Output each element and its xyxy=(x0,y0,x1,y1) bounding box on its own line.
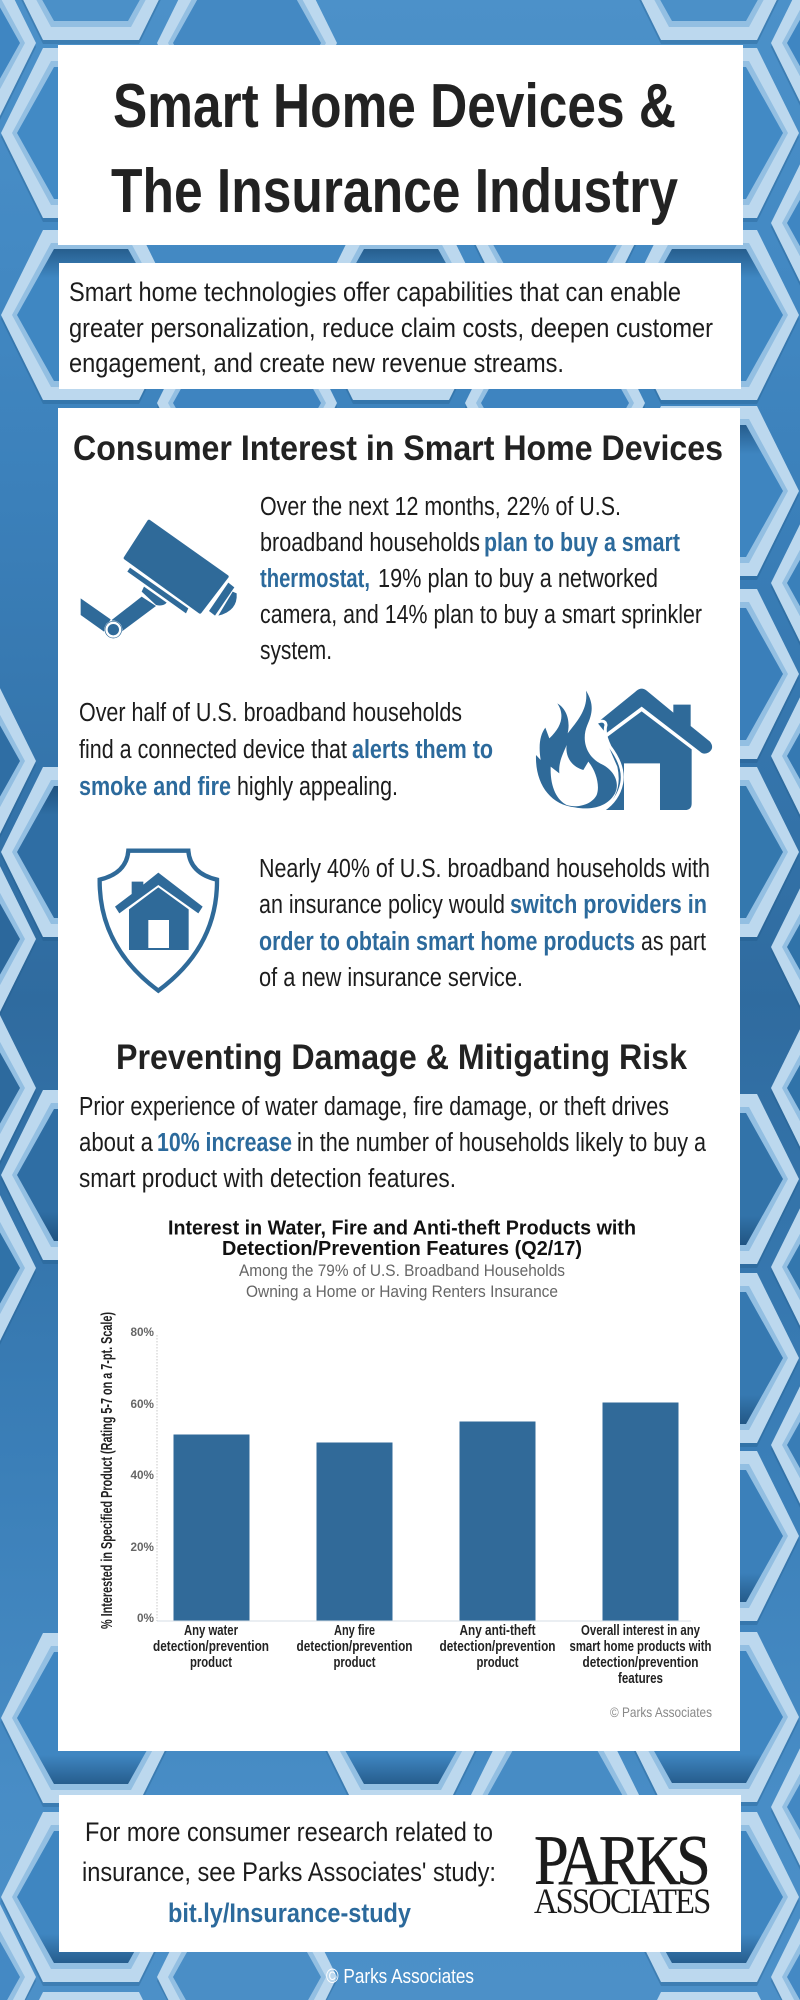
x axis labels: Overall interest in any xyxy=(581,1623,700,1639)
x axis labels: detection/prevention xyxy=(440,1639,556,1655)
bars xyxy=(174,1402,678,1620)
x axis labels: features xyxy=(618,1671,663,1687)
y axis labels: 0% xyxy=(137,1611,154,1625)
y axis labels: 40% xyxy=(130,1468,154,1482)
text: plan to buy: camera, and 14% plan to buy a smart sprinkler xyxy=(260,601,702,629)
icon: house on fire xyxy=(536,689,712,810)
text: plan to buy: system. xyxy=(260,637,332,665)
footer text: insurance, see Parks Associates' study: xyxy=(82,1857,496,1887)
x axis labels: product xyxy=(190,1655,232,1671)
intro text xyxy=(69,277,713,378)
panel: main content xyxy=(58,408,740,1751)
chart subtitle: Owning a Home or Having Renters Insurance xyxy=(246,1282,558,1301)
x axis labels: product xyxy=(334,1655,376,1671)
text: smoke and fire: smoke and fire xyxy=(79,773,231,801)
text: plan to buy xyxy=(260,493,702,665)
icon: security camera xyxy=(81,521,237,639)
chart subtitle xyxy=(239,1261,565,1301)
intro text: engagement, and create new revenue streams. xyxy=(69,348,564,378)
y axis labels: 60% xyxy=(130,1397,154,1411)
y axis labels: 80% xyxy=(130,1325,154,1339)
text: plan to buy: broadband households xyxy=(260,529,480,557)
text: plan to buy: Over the next 12 months, 22% of U.S. xyxy=(260,493,621,521)
x axis labels: smart home products with xyxy=(570,1639,712,1655)
chart credit: © Parks Associates xyxy=(610,1704,712,1720)
text: switch providers: of a new insurance service. xyxy=(259,964,523,992)
logo: Parks Associates: ASSOCIATES xyxy=(534,1881,711,1921)
x axis labels: Any water xyxy=(184,1623,238,1639)
text: prior experience: 10% increase xyxy=(157,1129,292,1157)
icon: shield with house xyxy=(100,851,217,991)
heading: preventing damage: Preventing Damage & Mitigating Risk xyxy=(116,1038,687,1077)
x axis labels: Any fire xyxy=(334,1623,375,1639)
text: switch providers: as part xyxy=(641,928,706,956)
text: prior experience: about a xyxy=(79,1129,154,1157)
title line 2: The Insurance Industry xyxy=(111,157,678,226)
panel: intro xyxy=(59,263,741,389)
y axis title: % Interested in Specified Product (Rating 5-7 on a 7-pt. Scale) xyxy=(99,1312,116,1629)
text: prior experience: smart product with detection features. xyxy=(79,1165,456,1193)
text: smoke and fire: Over half of U.S. broadband households xyxy=(79,699,462,727)
footer text xyxy=(82,1817,496,1928)
logo: Parks Associates: PARKS xyxy=(534,1821,711,1900)
heading: consumer interest: Consumer Interest in Smart Home Devices xyxy=(73,429,723,468)
text: smoke and fire: find a connected device that xyxy=(79,736,347,764)
x axis labels: detection/prevention xyxy=(153,1639,269,1655)
panel: title xyxy=(58,45,743,245)
text: prior experience: in the number of households likely to buy a xyxy=(297,1129,707,1157)
intro text: Smart home technologies offer capabilities that can enable xyxy=(69,277,681,307)
text: switch providers xyxy=(259,855,710,992)
text: switch providers: order to obtain smart home products xyxy=(259,928,635,956)
text: smoke and fire: alerts them to xyxy=(352,736,493,764)
footer text: bit.ly/Insurance-study xyxy=(168,1898,411,1928)
text: switch providers: Nearly 40% of U.S. broadband households with xyxy=(259,855,710,883)
chart: interest in detection products xyxy=(99,1218,712,1720)
chart subtitle: Among the 79% of U.S. Broadband Households xyxy=(239,1261,565,1280)
text: switch providers: switch providers in xyxy=(510,891,707,919)
footer text: For more consumer research related to xyxy=(85,1817,493,1847)
text: plan to buy: plan to buy a smart xyxy=(484,529,680,557)
intro text: greater personalization, reduce claim costs, deepen customer xyxy=(69,313,713,343)
chart title: Detection/Prevention Features (Q2/17) xyxy=(222,1238,582,1260)
x axis labels: product xyxy=(476,1655,519,1671)
y axis labels xyxy=(130,1325,154,1625)
chart title xyxy=(168,1218,636,1260)
text: plan to buy: 19% plan to buy a networked xyxy=(378,565,658,593)
y axis labels: 20% xyxy=(130,1540,154,1554)
text: switch providers: an insurance policy would xyxy=(259,891,505,919)
text: smoke and fire: highly appealing. xyxy=(237,773,398,801)
text: prior experience xyxy=(79,1093,707,1193)
copyright: © Parks Associates xyxy=(326,1966,474,1988)
text: plan to buy: thermostat, xyxy=(260,565,370,593)
text: smoke and fire xyxy=(79,699,493,801)
x axis labels xyxy=(153,1623,712,1687)
text: prior experience: Prior experience of water damage, fire damage, or theft drives xyxy=(79,1093,669,1121)
x axis labels: Any anti-theft xyxy=(460,1623,536,1639)
x axis labels: detection/prevention xyxy=(582,1655,698,1671)
x axis labels: detection/prevention xyxy=(296,1639,412,1655)
panel: footer xyxy=(59,1795,741,1952)
title line 1: Smart Home Devices & xyxy=(113,72,676,141)
chart title: Interest in Water, Fire and Anti-theft Products with xyxy=(168,1218,636,1240)
